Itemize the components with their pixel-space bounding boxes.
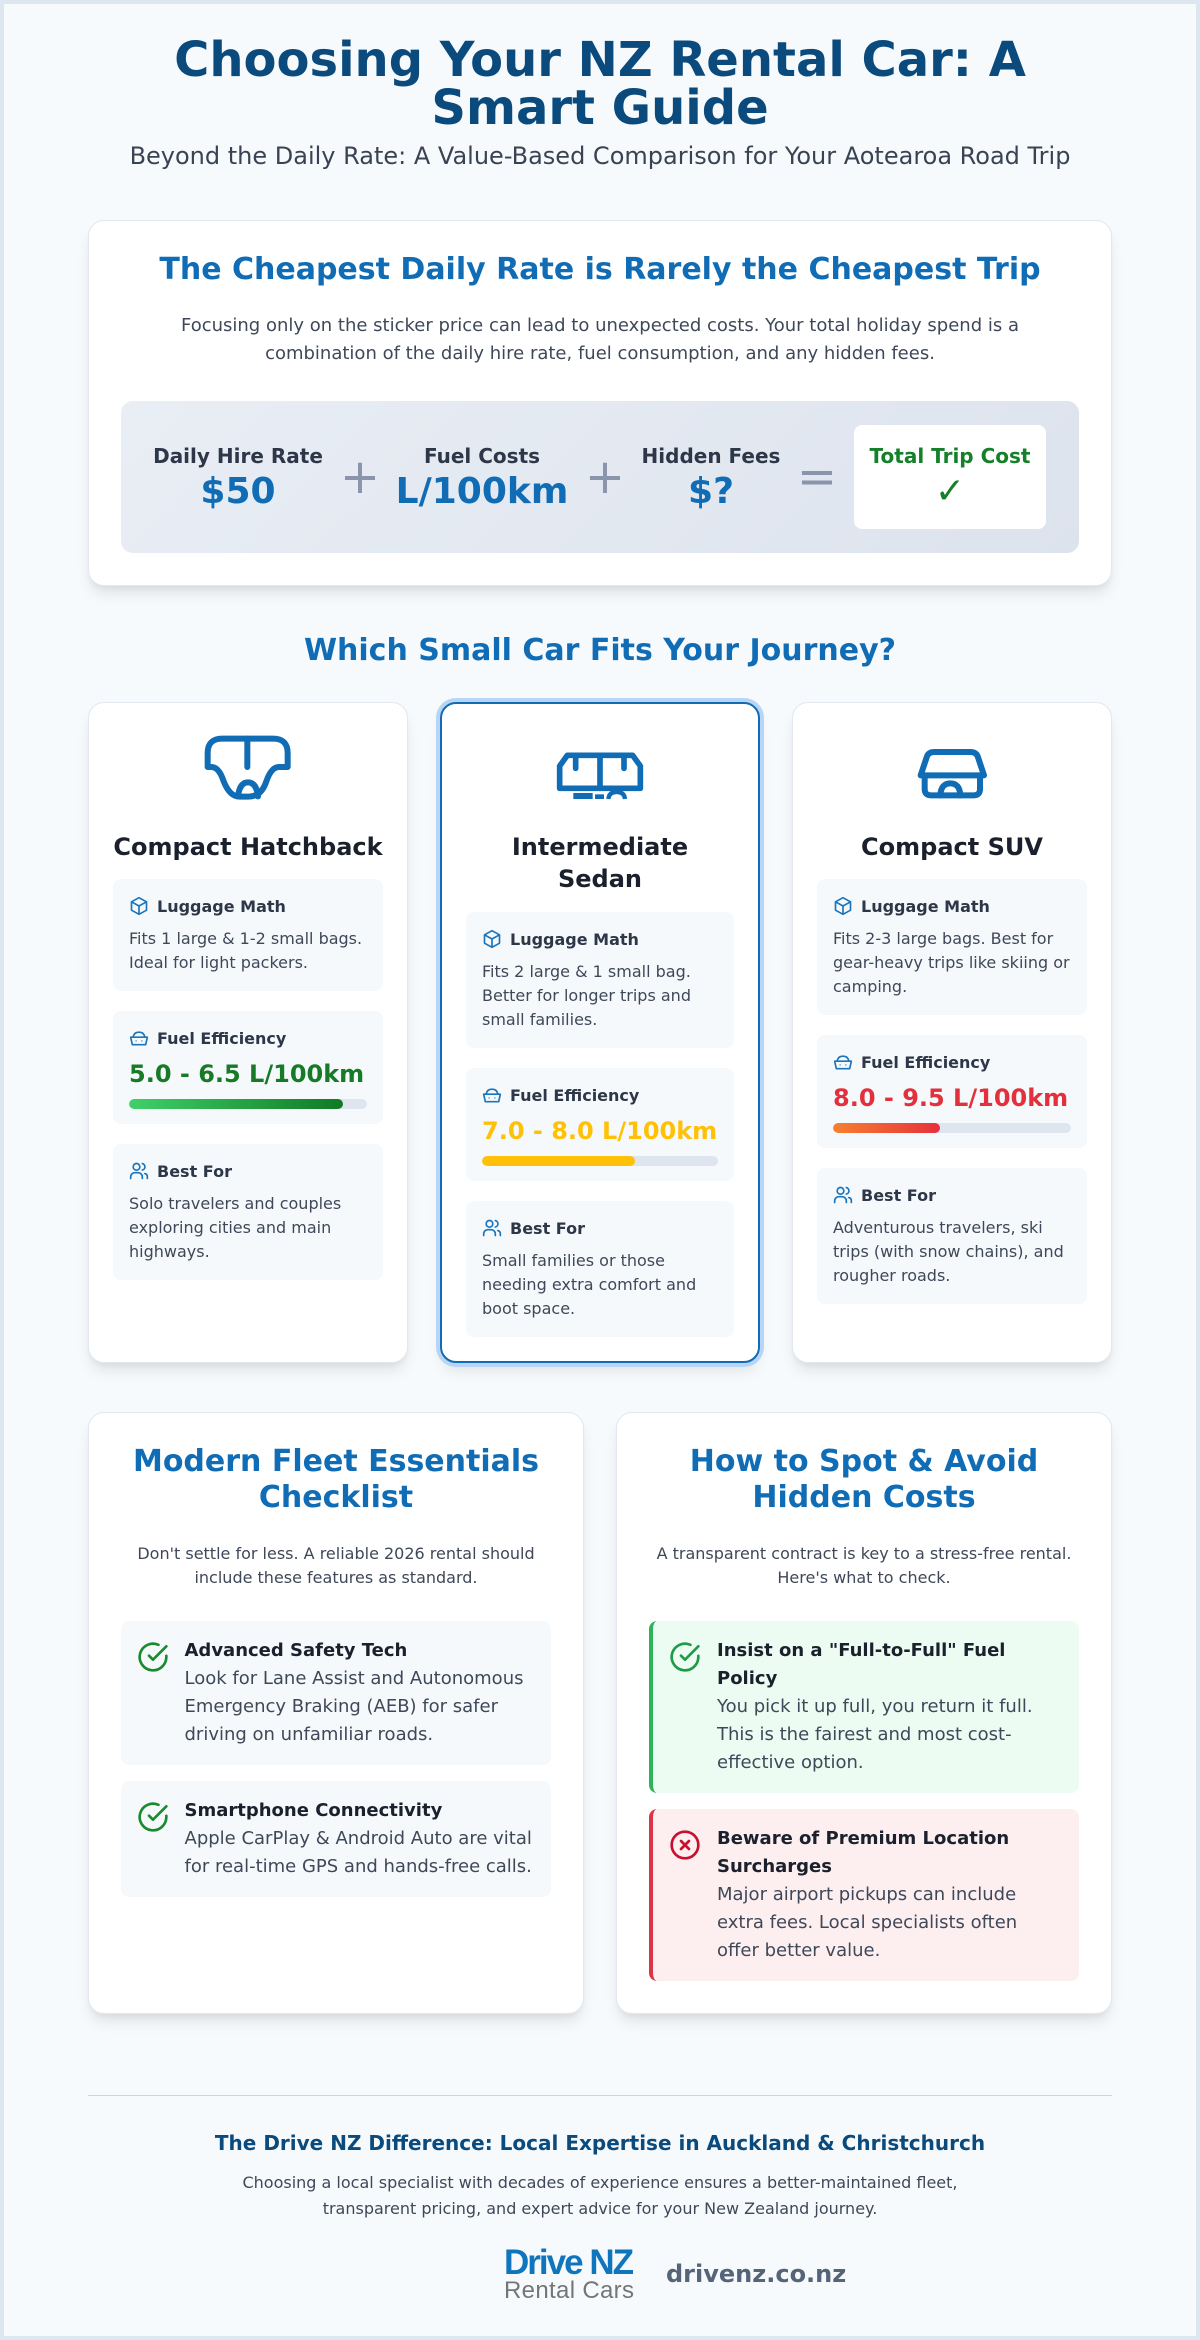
item: smartphone connectivity: Smartphone Connectivity	[184, 1800, 442, 1821]
fuel value: 5.0 - 6.5 L/100km	[129, 1060, 364, 1088]
fuel bar	[482, 1156, 718, 1166]
subtitle: Beyond the Daily Rate: A Value-Based Comparison for Your Aotearoa Road Trip	[130, 142, 1070, 170]
item: smartphone connectivity	[121, 1781, 551, 1897]
result: total trip cost: ✓	[935, 471, 965, 512]
tip: full-to-full: You pick it up full, you return it full. This is the fairest and most cost-effective option.	[717, 1696, 1033, 1773]
panel: intermediate sedan	[440, 702, 760, 1363]
term: hidden fees: Hidden Fees	[642, 444, 780, 468]
fuel block	[466, 1068, 734, 1181]
fuel block	[113, 1011, 383, 1124]
intro text: A transparent contract is key to a stress-free rental. Here's what to check.	[657, 1544, 1071, 1586]
item: safety tech: Look for Lane Assist and Autonomous Emergency Braking (AEB) for safer driving on unfamiliar roads.	[184, 1668, 523, 1745]
fuel bar	[833, 1123, 1071, 1133]
operator: plus: +	[585, 449, 625, 505]
car name: Compact Hatchback	[113, 833, 383, 861]
footer text: Choosing a local specialist with decades of experience ensures a better-maintained fleet, transparent pricing, and expert advice for your New Zealand journey.	[242, 2173, 958, 2218]
luggage label: Luggage Math	[157, 897, 286, 916]
fuel label: Fuel Efficiency	[510, 1086, 639, 1104]
term: hidden fees: $?	[688, 471, 734, 512]
title: Choosing Your NZ Rental Car: A Smart Guide	[174, 32, 1026, 136]
car name: Compact SUV	[861, 833, 1043, 861]
cost formula	[121, 401, 1079, 553]
luggage text: Fits 2-3 large bags. Best for gear-heavy trips like skiing or camping.	[833, 929, 1070, 996]
section heading: Which Small Car Fits Your Journey?	[304, 633, 896, 668]
operator: plus: +	[340, 449, 380, 505]
tip: surcharges: Major airport pickups can include extra fees. Local specialists often offer better value.	[717, 1884, 1017, 1961]
icon: sedan	[556, 752, 644, 800]
luggage block	[817, 879, 1087, 1015]
panel heading: Modern Fleet Essentials Checklist	[133, 1444, 539, 1515]
best for text: Adventurous travelers, ski trips (with snow chains), and rougher roads.	[833, 1218, 1064, 1285]
logo: Drive NZ Rental Cars: Rental Cars	[504, 2277, 634, 2304]
term: daily hire rate: $50	[200, 471, 276, 512]
operator: equals: =	[797, 449, 837, 505]
item: smartphone connectivity: Apple CarPlay & Android Auto are vital for real-time GPS and hands-free calls.	[184, 1828, 532, 1877]
icon: hatchback	[204, 736, 291, 800]
panel heading: The Cheapest Daily Rate is Rarely the Cheapest Trip	[159, 252, 1041, 287]
tip: full-to-full	[649, 1621, 1079, 1793]
fuel bar	[129, 1099, 367, 1109]
fuel label: Fuel Efficiency	[861, 1053, 990, 1072]
website: drivenz.co.nz	[666, 2260, 846, 2288]
footer heading: The Drive NZ Difference: Local Expertise in Auckland & Christchurch	[215, 2131, 985, 2155]
car name: Intermediate Sedan	[512, 833, 688, 893]
term: fuel costs	[396, 444, 568, 512]
footer	[88, 2095, 1112, 2335]
fuel block	[817, 1035, 1087, 1148]
fuel value: 7.0 - 8.0 L/100km	[482, 1117, 717, 1145]
term: fuel costs: L/100km	[396, 471, 568, 512]
term: daily hire rate	[153, 444, 323, 512]
fuel label: Fuel Efficiency	[157, 1029, 286, 1048]
tip: surcharges	[649, 1809, 1079, 1981]
panel: hidden costs	[616, 1412, 1112, 2014]
panel: compact SUV	[792, 702, 1112, 1363]
best for block	[113, 1144, 383, 1280]
checklist	[121, 1621, 551, 1897]
term: fuel costs: Fuel Costs	[424, 444, 540, 468]
fuel value: 8.0 - 9.5 L/100km	[833, 1084, 1068, 1112]
intro text: Focusing only on the sticker price can lead to unexpected costs. Your total holiday spend is a combination of the daily hire rate, fuel consumption, and any hidden fees.	[181, 315, 1019, 364]
luggage label: Luggage Math	[861, 897, 990, 916]
result: total trip cost: Total Trip Cost	[870, 444, 1030, 468]
best for label: Best For	[157, 1162, 232, 1181]
tips	[649, 1621, 1079, 1981]
result: total trip cost	[854, 425, 1046, 529]
luggage block	[466, 912, 734, 1048]
panel heading: How to Spot & Avoid Hidden Costs	[690, 1444, 1038, 1515]
term: daily hire rate: Daily Hire Rate	[153, 444, 323, 468]
logo: Drive NZ Rental Cars: Drive NZ	[504, 2243, 634, 2282]
term: hidden fees	[642, 444, 780, 512]
luggage label: Luggage Math	[510, 930, 639, 948]
best for block	[466, 1201, 734, 1337]
best for label: Best For	[861, 1186, 936, 1205]
panel: cheapest daily rate	[88, 220, 1112, 586]
best for block	[817, 1168, 1087, 1304]
logo: Drive NZ Rental Cars	[504, 2243, 634, 2304]
panel: compact hatchback	[88, 702, 408, 1363]
best for text: Solo travelers and couples exploring cities and main highways.	[129, 1194, 341, 1261]
best for text: Small families or those needing extra comfort and boot space.	[482, 1251, 696, 1318]
tip: full-to-full: Insist on a "Full-to-Full" Fuel Policy	[717, 1640, 1005, 1689]
luggage text: Fits 2 large & 1 small bag. Better for longer trips and small families.	[482, 962, 691, 1029]
item: safety tech: Advanced Safety Tech	[184, 1640, 407, 1661]
item: safety tech	[121, 1621, 551, 1765]
luggage block	[113, 879, 383, 991]
panel: fleet essentials	[88, 1412, 584, 2014]
tip: surcharges: Beware of Premium Location Surcharges	[717, 1828, 1009, 1877]
icon: SUV	[918, 749, 987, 798]
luggage text: Fits 1 large & 1-2 small bags. Ideal for light packers.	[129, 929, 362, 972]
intro text: Don't settle for less. A reliable 2026 rental should include these features as standard.	[137, 1544, 535, 1586]
best for label: Best For	[510, 1218, 585, 1238]
